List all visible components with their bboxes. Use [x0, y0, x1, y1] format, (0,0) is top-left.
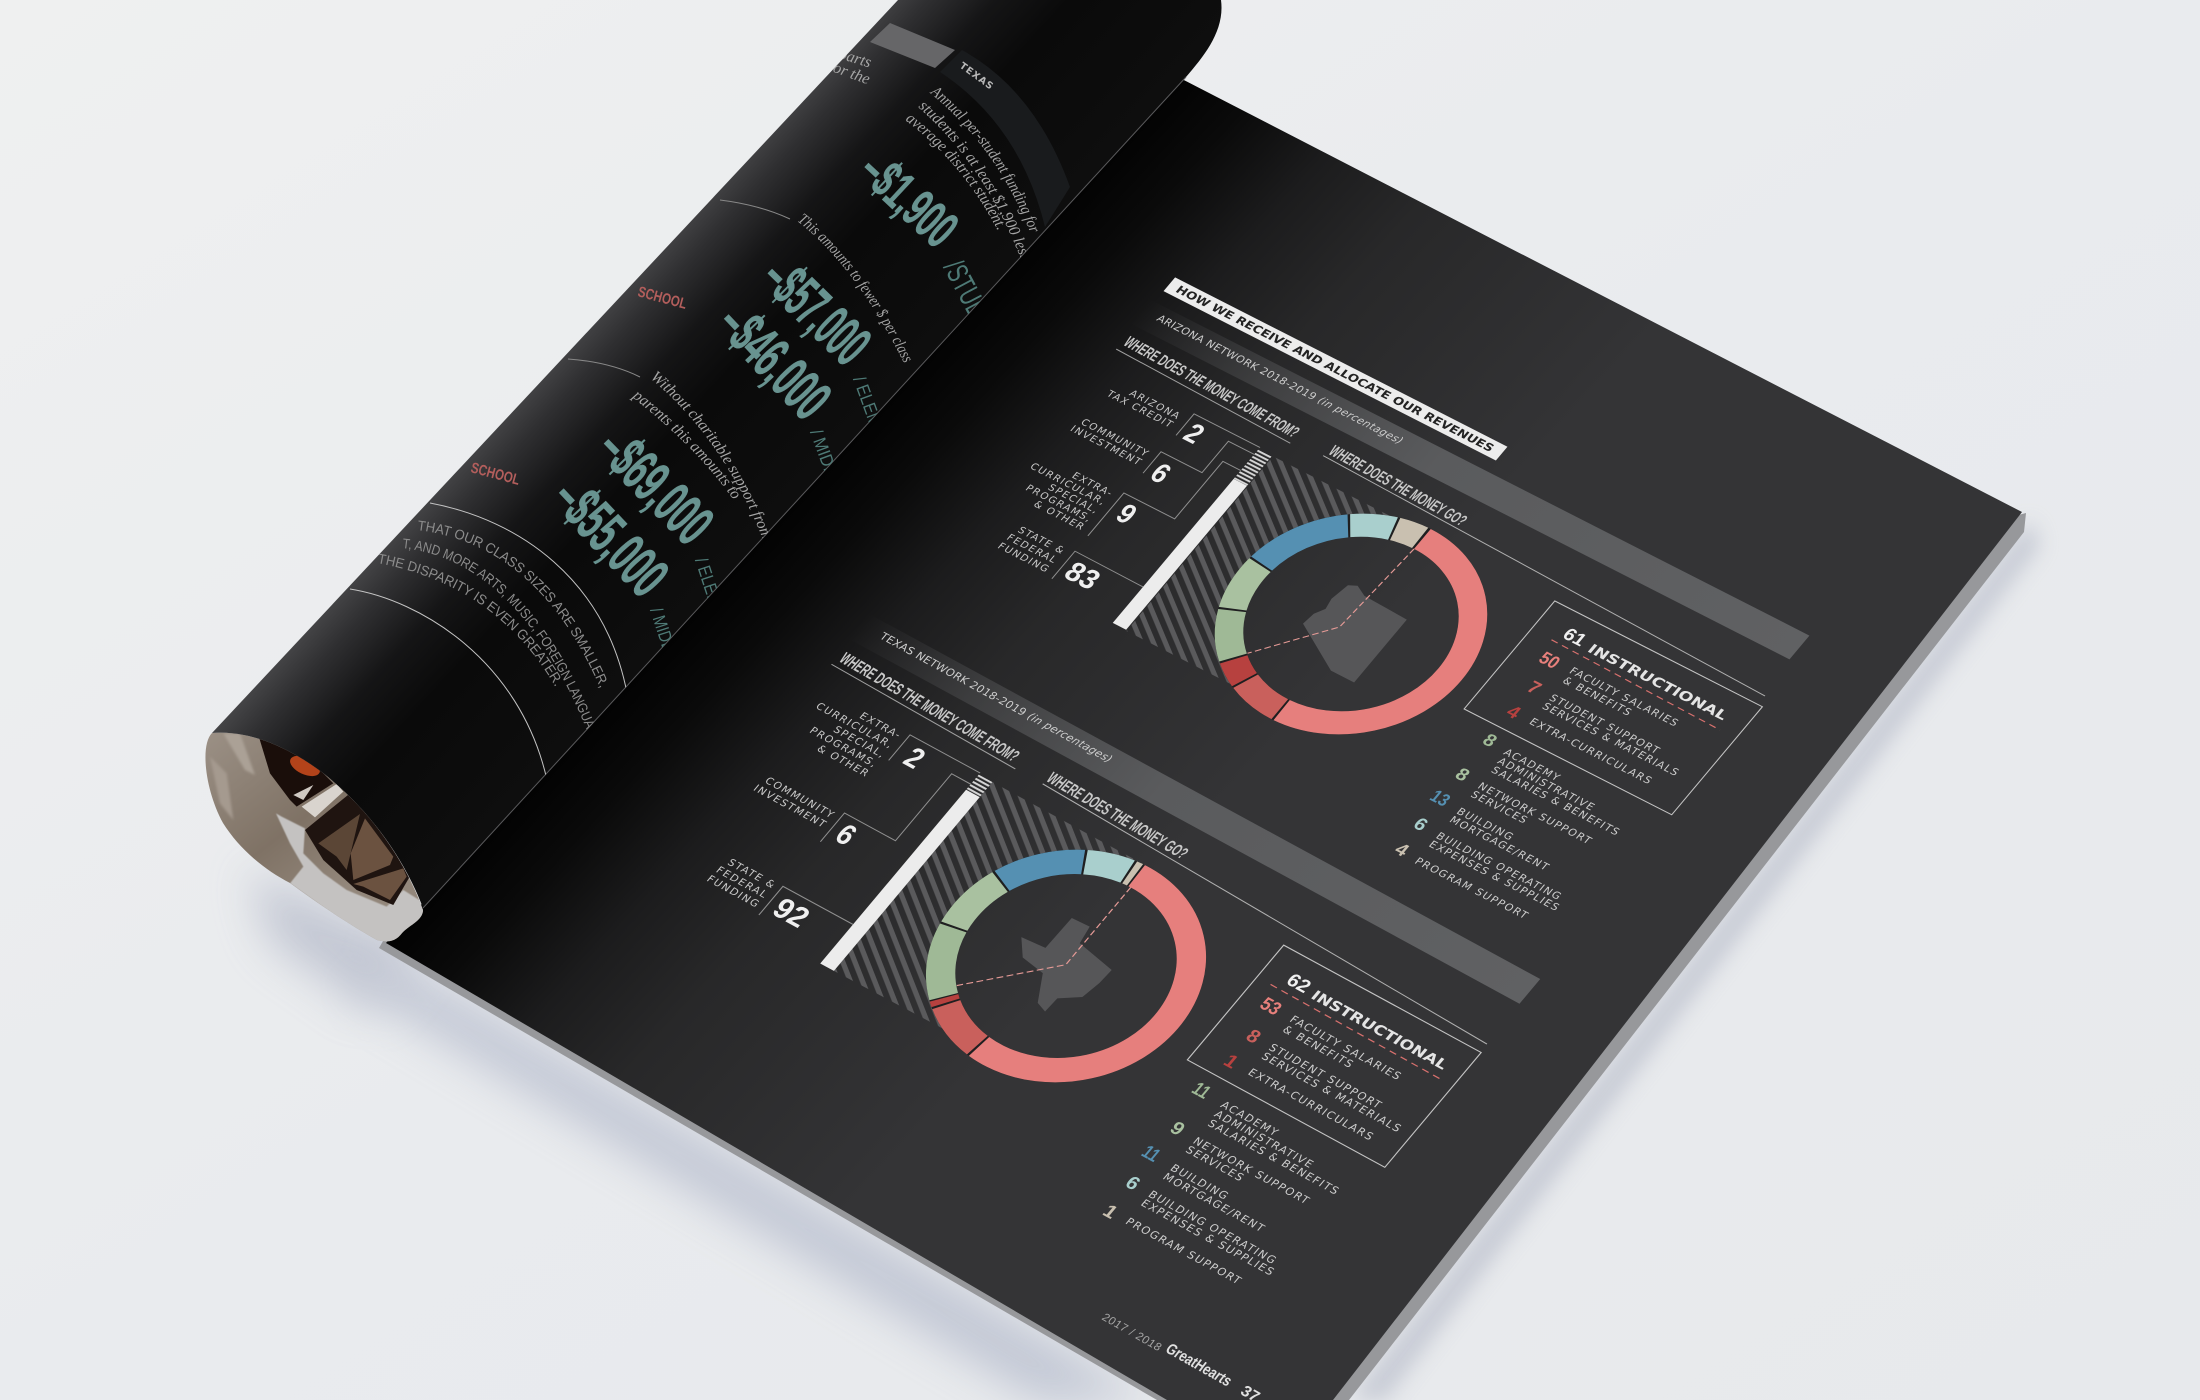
grey band [1130, 300, 1809, 659]
box: instructional: INSTRUCTIONAL [1307, 988, 1450, 1073]
source: state federal [703, 854, 819, 934]
heading: money from [1113, 332, 1308, 443]
legend rows: SERVICES [1468, 789, 1531, 826]
source: community: COMMUNITY [762, 775, 837, 821]
source: community [745, 772, 864, 852]
source: extra-curricular [1006, 453, 1143, 547]
text: fewer per class: This amounts to fewer $ per class [798, 213, 911, 362]
legend rows: 11 [1187, 1079, 1215, 1103]
roll: curled page [212, 0, 1222, 908]
stat: -$57,000 [768, 266, 878, 422]
divider arcs [350, 200, 790, 780]
stat: -$69,000 [604, 439, 717, 598]
source: state federal: FEDERAL [713, 865, 771, 901]
connector lines [1052, 413, 1260, 614]
label: school: SCHOOL [636, 283, 689, 313]
source: extra-curricular: SPECIAL, [831, 724, 888, 761]
roll: inner lip [205, 733, 423, 941]
hatched area [834, 782, 1149, 1056]
icon: Arizona map [1284, 578, 1412, 682]
text: charitable support: parents this amounts to [629, 392, 738, 498]
box: instructional: 53 [1255, 994, 1286, 1020]
source: extra-curricular: PROGRAMS, [807, 725, 880, 770]
panel: Arizona network [895, 275, 1839, 944]
box: instructional: 1 [1219, 1051, 1243, 1073]
box: instructional: 61 [1558, 625, 1591, 651]
stat: -$57,000: / ELEM [849, 374, 886, 429]
source: extra-curricular: 9 [1109, 499, 1143, 530]
legend rows: 6 [1409, 815, 1432, 835]
legend rows: EXPENSES & SUPPLIES [1138, 1197, 1278, 1279]
text: class sizes [379, 520, 606, 730]
text: Texas funding: students is at least $1,900 less [918, 102, 1026, 258]
box: instructional: SERVICES & MATERIALS [1259, 1050, 1405, 1135]
page edge [379, 513, 2026, 1400]
stat: -$1,900: /STUD [937, 255, 994, 323]
box: instructional: EXTRA-CURRICULARS [1245, 1066, 1377, 1143]
legend rows: 8 [1451, 765, 1473, 786]
source: state federal: STATE & [725, 857, 779, 891]
legend rows: ACADEMY [1218, 1099, 1282, 1139]
legend rows [1089, 1079, 1363, 1301]
stat: -$1,900: –$1,900 [848, 140, 969, 259]
heading: money from [829, 647, 1032, 769]
legend rows: BUILDING OPERATING [1145, 1188, 1280, 1267]
box: instructional: 8 [1241, 1026, 1265, 1048]
legend rows: PROGRAM SUPPORT [1412, 856, 1531, 922]
box: instructional: & BENEFITS [1560, 675, 1635, 719]
source: extra-curricular [789, 691, 933, 795]
source: community: 6 [1143, 458, 1177, 490]
source: tax credit: ARIZONA [1127, 389, 1183, 422]
legend rows: ACADEMY [1501, 747, 1563, 784]
source: tax credit: TAX CREDIT [1103, 389, 1176, 430]
source: community: INVESTMENT [1068, 424, 1144, 468]
source: community: 6 [829, 818, 864, 852]
box: instructional [1464, 601, 1762, 815]
source: state federal: FUNDING [995, 541, 1052, 575]
text: charitable support: Without charitable support from [652, 370, 768, 538]
box: instructional: 50 [1534, 649, 1564, 673]
legend rows: NETWORK SUPPORT [1475, 781, 1595, 847]
legend rows: MORTGAGE/RENT [1447, 814, 1552, 873]
legend rows: BUILDING [1167, 1162, 1232, 1203]
heading: money go [1314, 441, 1786, 696]
box: instructional: 62 [1282, 970, 1315, 997]
stat: -$1,900 [864, 162, 982, 314]
stacked bar [1113, 449, 1272, 630]
grey band [848, 614, 1540, 1004]
grey band on roll [870, 23, 955, 68]
text: class sizes: THE DISPARITY IS EVEN GREATER. [379, 554, 560, 686]
legend rows: SALARIES & BENEFITS [1488, 765, 1623, 838]
label: Texas: TEXAS [957, 61, 996, 93]
stat: -$46,000: / MIDD [806, 427, 842, 480]
icon: Texas map [986, 904, 1130, 1023]
intro text fragments: parts [836, 45, 873, 71]
stat: -$46,000: –$46,000 [705, 290, 844, 432]
source: extra-curricular: & OTHER [1031, 500, 1087, 533]
box: instructional: 4 [1502, 702, 1525, 723]
box: instructional: FACULTY SALARIES [1567, 666, 1682, 729]
label: school: SCHOOL [469, 459, 522, 489]
footer: 2017 / 2018 [1099, 1312, 1164, 1354]
box: instructional: STUDENT SUPPORT [1547, 693, 1663, 757]
dim band on roll [940, 50, 1070, 227]
legend rows: EXPENSES & SUPPLIES [1426, 839, 1563, 914]
legend rows: 8 [1478, 731, 1501, 751]
legend rows: 6 [1121, 1173, 1144, 1195]
legend rows: 1 [1098, 1201, 1122, 1223]
heading: money from: WHERE DOES THE MONEY COME FROM? [836, 649, 1024, 765]
legend rows: SALARIES & BENEFITS [1205, 1117, 1343, 1198]
footer: GreatHearts [1162, 1341, 1235, 1390]
box: instructional: FACULTY SALARIES [1287, 1013, 1405, 1083]
box: instructional: STUDENT SUPPORT [1266, 1041, 1385, 1112]
donut chart [1181, 489, 1521, 759]
roll: inner photo [210, 733, 430, 950]
source: community [1061, 416, 1177, 490]
heading: money go [1032, 768, 1511, 1044]
box: instructional: 7 [1522, 678, 1545, 699]
source: state federal: FUNDING [704, 874, 763, 910]
legend rows: 4 [1390, 840, 1413, 861]
heading: money go: WHERE DOES THE MONEY GO? [1043, 769, 1192, 863]
text: class sizes: T, AND MORE ARTS, MUSIC, FOREIGN LANGUAGE [403, 538, 594, 730]
source: state federal: 92 [766, 892, 817, 934]
legend rows: BUILDING OPERATING [1433, 831, 1565, 903]
source: state federal [995, 523, 1108, 596]
source: extra-curricular: CURRICULAR, [813, 701, 896, 751]
legend rows [1384, 729, 1644, 932]
dashed pointer [1248, 521, 1414, 681]
stat: -$55,000: / MIDD [646, 605, 679, 655]
stat: -$69,000: –$69,000 [585, 414, 726, 557]
heading: money from: WHERE DOES THE MONEY COME FROM? [1120, 333, 1303, 441]
legend rows: ADMINISTRATIVE [1495, 756, 1598, 814]
source: community: INVESTMENT [751, 783, 829, 831]
stat: -$69,000: / ELEM [691, 555, 726, 609]
intro text fragments: for the [827, 58, 872, 88]
source: state federal: STATE & [1015, 525, 1067, 557]
legend rows: BUILDING [1454, 806, 1517, 843]
box: instructional [1187, 945, 1481, 1167]
box: instructional: EXTRA-CURRICULARS [1527, 716, 1655, 787]
roll: edge highlight [423, 77, 1186, 908]
source: extra-curricular: SPECIAL, [1045, 483, 1101, 516]
stat: -$57,000: –$57,000 [749, 243, 884, 377]
legend rows: ADMINISTRATIVE [1211, 1108, 1317, 1171]
source: community: COMMUNITY [1078, 417, 1151, 460]
box: instructional: & BENEFITS [1280, 1023, 1357, 1071]
shadow under magazine [250, 520, 2040, 1400]
panel: right magazine page [386, 77, 2022, 1400]
box: instructional: SERVICES & MATERIALS [1539, 701, 1682, 779]
heading: money go: WHERE DOES THE MONEY GO? [1325, 442, 1471, 529]
connector lines [759, 735, 980, 953]
source: extra-curricular: PROGRAMS, [1023, 483, 1094, 525]
legend rows: 11 [1137, 1142, 1165, 1166]
panel: Texas network [592, 614, 1542, 1309]
legend rows: 13 [1425, 787, 1454, 811]
text: Texas funding: Annual per-student funding for [930, 88, 1038, 232]
source: extra-curricular: & OTHER [814, 743, 872, 780]
intro text fragments [833, 54, 871, 84]
source: extra-curricular: EXTRA- [857, 710, 904, 741]
source: extra-curricular: EXTRA- [1069, 471, 1115, 499]
hatched area [1126, 456, 1426, 709]
box: instructional: INSTRUCTIONAL [1584, 642, 1731, 724]
source: state federal: FEDERAL [1004, 533, 1060, 566]
title: HOW WE RECEIVE AND ALLOCATE OUR REVENUES [1173, 283, 1497, 454]
legend rows: MORTGAGE/RENT [1160, 1171, 1268, 1235]
text: class sizes: THAT OUR CLASS SIZES ARE SMALLER, [418, 520, 606, 688]
subtitle: TEXAS NETWORK 2018-2019 (in percentages) [876, 630, 1116, 766]
legend rows: SERVICES [1183, 1144, 1247, 1184]
source: extra-curricular: 2 [897, 741, 932, 775]
legend rows: NETWORK SUPPORT [1190, 1135, 1313, 1207]
stat: -$46,000 [724, 314, 833, 471]
subtitle: ARIZONA NETWORK 2018-2019 (in percentages) [1154, 313, 1407, 447]
source: tax credit [1098, 378, 1211, 450]
source: extra-curricular: CURRICULAR, [1027, 462, 1108, 508]
legend rows: PROGRAM SUPPORT [1123, 1215, 1245, 1287]
source: state federal: 83 [1058, 556, 1107, 596]
text: Texas funding: average district student. [906, 116, 1004, 230]
stat: -$55,000 [559, 488, 672, 648]
dashed pointer [957, 853, 1131, 1020]
stat: -$55,000: –$55,000 [540, 464, 681, 609]
stacked bar [820, 775, 992, 971]
source: tax credit: 2 [1177, 418, 1211, 450]
roll: page content [350, 23, 1070, 775]
legend rows: 9 [1165, 1118, 1189, 1140]
donut chart [885, 818, 1247, 1114]
footer [1099, 1306, 1263, 1400]
